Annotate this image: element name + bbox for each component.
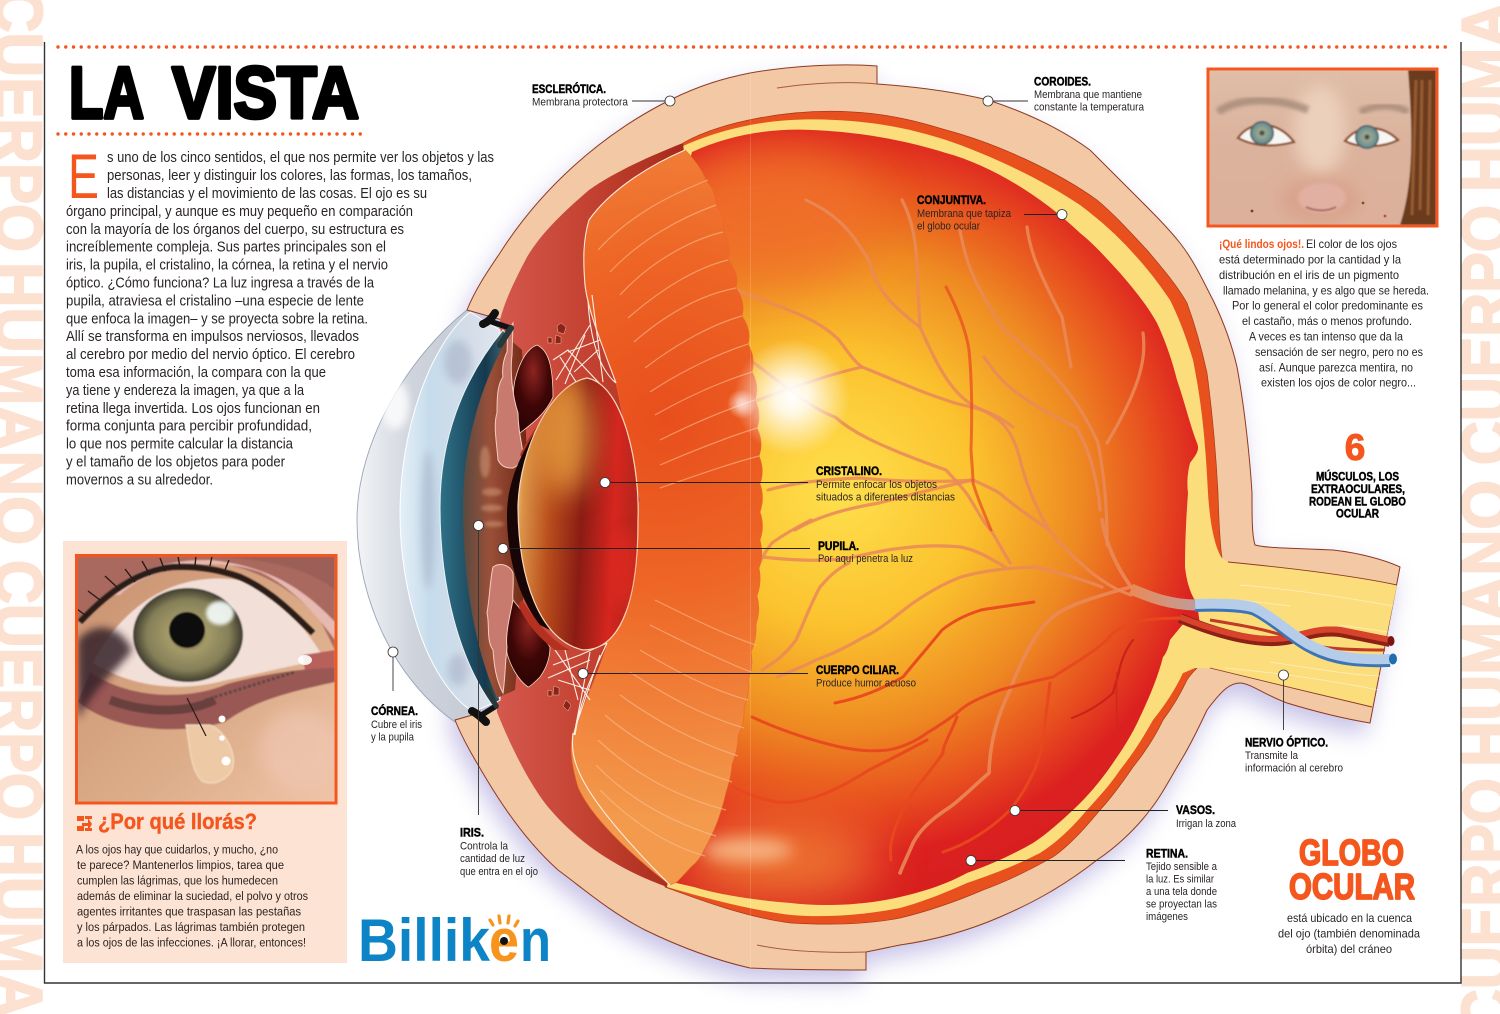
label: iris: Controla la [460,840,509,852]
label: esclerótica: ESCLERÓTICA. [532,81,606,96]
cornea grey patches [421,340,472,686]
intro text: forma conjunta para percibir profundidad, [66,419,312,435]
panel text: a los ojos de las infecciones. ¡A llorar, entonces! [77,936,306,950]
photo frame [76,556,336,803]
caption: qué lindos ojos: existen los ojos de color negro... [1261,376,1416,390]
eye shadow [450,77,1395,982]
label: coroides: Membrana que mantiene [1034,89,1142,101]
label: retina: imágenes [1146,911,1188,923]
label: conjuntiva: el globo ocular [917,220,980,232]
pale vessels [737,200,1144,873]
title dotted rule [58,132,361,136]
sclera seam lines [757,83,877,952]
label: vasos: VASOS. [1176,803,1215,817]
label: retina: RETINA. [1146,846,1188,860]
ciliary ribs [596,180,759,856]
panel text: agentes irritantes que traspasan las pestañas [77,904,301,918]
label: retina: a una tela donde [1146,886,1217,898]
intro text [66,142,494,488]
photo: child's eyes [1208,69,1437,226]
stat text: OCULAR [1336,506,1379,520]
sclera [455,65,1400,970]
intro text: lo que nos permite calcular la distancia [66,437,294,453]
heading: globo ocular [1289,832,1415,907]
label: cristalino [600,464,955,504]
label: iris: que entra en el ojo [460,866,538,878]
photo frame [1208,69,1437,226]
photo: crying eye [77,555,340,802]
label: conjuntiva: CONJUNTIVA. [917,193,986,207]
blood vessels [660,145,1185,900]
stat text: RODEAN EL GLOBO [1309,494,1406,508]
label: iris: IRIS. [460,826,484,840]
panel: por qué lloras [63,541,347,963]
label: cristalino: CRISTALINO. [816,464,882,478]
lower light patch [703,838,793,862]
iris pink lobe upper [495,323,523,468]
logo: Billiken: Billik [358,907,491,974]
intro text: movernos a su alrededor. [66,472,213,488]
side band left [0,0,56,1014]
intro text: las distancias y el movimiento de las cosas. El ojo es su [107,186,427,202]
label: esclerótica: Membrana protectora [532,96,629,108]
label: vasos [1010,803,1237,830]
panel text: te parece? Mantenerlos limpios, tarea que [77,858,284,872]
title: LA [69,53,144,134]
icon: arrow square [77,816,92,831]
caption: qué lindos ojos: el castaño, más o menos profundo. [1242,314,1412,328]
back chamber upper [513,345,553,433]
label: esclerótica [532,81,675,108]
back chamber lower [506,600,550,687]
retina [600,130,1200,905]
lens highlights [537,375,637,610]
label: córnea: Cubre el iris [371,719,422,731]
label: conjuntiva [917,193,1067,232]
intro text: órgano principal, y aunque es muy pequeño en comparación [66,204,413,220]
caption: qué lindos ojos: Por lo general el color predominante es [1232,299,1423,313]
red vessels [733,287,1185,860]
label: cristalino: Permite enfocar los objetos [816,479,937,491]
label: cuerpo ciliar: Produce humor acuoso [816,678,916,690]
nerve trunk fade [1131,589,1197,605]
intro text: que enfoca la imagen– y se proyecta sobre la retina. [66,311,368,327]
stat text [1309,468,1406,520]
print seam [750,73,752,968]
intro text: y el tamaño de los objetos para poder [66,454,285,470]
stat: six muscles [1309,427,1406,520]
text: globo ocular: está ubicado en la cuenca [1287,911,1412,925]
caption: qué lindos ojos: ¡Qué lindos ojos!. [1219,237,1304,251]
label: nervio óptico: NERVIO ÓPTICO. [1245,734,1328,750]
vitreous yellow layer and nerve [667,119,1397,916]
panel text: A los ojos hay que cuidarlos, y mucho, ¿no [76,842,278,856]
label: coroides: constante la temperatura [1034,102,1145,114]
nerve fibres [1225,585,1393,690]
limbus top [483,313,511,345]
lower orange tint [680,820,880,900]
label: pupila [498,539,913,565]
caption: qué lindos ojos: A veces es tan intenso que da la [1249,330,1403,344]
label: cuerpo ciliar: CUERPO CILIAR. [816,663,899,677]
text: globo ocular [1278,911,1420,956]
panel text [76,842,308,950]
label: iris: cantidad de luz [460,853,525,865]
label: córnea [371,647,422,744]
panel heading: ¿Por qué llorás? [98,809,257,834]
label: iris [460,520,538,878]
title [69,53,359,134]
label: nervio óptico [1245,670,1343,774]
limbus bottom [472,690,496,722]
panel text: cumplen las lágrimas, que los humedecen [77,874,278,888]
eye diagram [357,65,1400,982]
intro text: con la mayoría de los órganos del cuerpo, su estructura es [66,222,404,238]
logo: Billiken: e [489,907,519,974]
caption: qué lindos ojos: llamado melanina, y es algo que se hereda. [1223,283,1429,297]
intro text: ya tiene y endereza la imagen, ya que a la [66,383,305,399]
suspensory web lower [548,643,670,885]
cornea light-blue layer [400,312,500,712]
label: coroides: COROIDES. [1034,74,1091,88]
text: globo ocular: órbita) del cráneo [1306,942,1392,956]
logo rays [490,916,518,926]
logo: Billiken: n [520,907,551,974]
iris light highlights [480,446,504,527]
intro text: retina llega invertida. Los ojos funcionan en [66,401,320,417]
nerve end [1389,654,1397,664]
nerve sheath lines [1210,562,1397,707]
anterior chamber dark blue [440,330,510,705]
intro text: óptico. ¿Cómo funciona? La luz ingresa a través de la [66,276,375,292]
label: nervio óptico: Transmite la [1245,750,1299,762]
top dotted rule [58,45,1450,49]
caption: qué lindos ojos: está determinado por la cantidad y la [1219,252,1401,266]
ciliary muscle [490,143,700,887]
vessel end [1388,636,1394,646]
stat number: 6 [1345,427,1365,468]
side band right [1448,2,1500,1014]
drop cap: E [68,142,99,212]
intro text: iris, la pupila, el cristalino, la córnea, la retina y el nervio [66,258,388,274]
label: córnea: y la pupila [371,732,415,744]
label: retina: se proyectan las [1146,898,1217,910]
caption: qué lindos ojos: así. Aunque parezca mentira, no [1259,360,1413,374]
label: cristalino: situados a diferentes distancias [816,492,955,504]
intro text: pupila, atraviesa el cristalino –una especie de lente [66,293,364,309]
suspensory web upper [553,295,616,385]
black crescent [507,425,550,630]
stat text: EXTRAOCULARES, [1311,482,1405,496]
iris brown [463,338,530,698]
iris pink lobe lower [487,565,513,693]
cornea highlight [381,381,409,429]
caption: qué lindos ojos: distribución en el iris de un pigmento [1219,268,1399,282]
small glare [727,389,757,419]
label: retina: Tejido sensible a [1146,861,1218,873]
cornea outer [357,310,500,722]
intro text: al cerebro por medio del nervio óptico. El cerebro [66,347,355,363]
optic vessel red [1180,617,1390,650]
label: pupila: Por aquí penetra la luz [818,553,913,565]
label: conjuntiva: Membrana que tapiza [917,208,1012,220]
intro text: Allí se transforma en impulsos nerviosos, llevados [66,329,359,345]
heading: globo ocular: GLOBO [1299,832,1404,873]
optic nerve blue [1195,604,1390,661]
text: globo ocular: del ojo (también denominada [1278,926,1420,940]
stat text: MÚSCULOS, LOS [1316,468,1399,484]
intro text: increíblemente compleja. Sus partes principales son el [66,240,386,256]
caption: qué lindos ojos: El color de los ojos [1306,237,1397,251]
logo eye [500,937,508,945]
upper orange tint [660,145,880,285]
pigment granules [548,323,571,711]
ciliary band with scalloped edge [571,150,762,885]
intro text: personas, leer y distinguir los colores, las formas, los tamaños, [107,168,472,184]
caption: qué lindos ojos: sensación de ser negro, pero no es [1255,345,1423,359]
label: retina [966,846,1218,923]
label: coroides [983,74,1145,114]
lens [518,378,638,650]
intro text: s uno de los cinco sentidos, el que nos permite ver los objetos y las [107,150,494,166]
sliver behind lens [518,385,595,650]
label: córnea: CÓRNEA. [371,703,418,718]
panel text: y los párpados. Las lágrimas también protegen [77,920,305,934]
label: pupila: PUPILA. [818,539,859,553]
caption: qué lindos ojos [1219,237,1429,390]
title: VISTA [172,53,359,134]
heading: globo ocular: OCULAR [1289,866,1415,907]
label: cuerpo ciliar [578,663,916,690]
outer white edge of band [584,150,685,383]
label: retina: la luz. Es similar [1146,874,1214,886]
choroid layer [665,111,1230,924]
label: vasos: Irrigan la zona [1176,818,1237,830]
intro text: toma esa información, la compara con la que [66,365,326,381]
label: nervio óptico: información al cerebro [1245,762,1343,774]
panel text: además de eliminar la suciedad, el polvo y otros [77,889,308,903]
retina glare [734,339,850,455]
panel background [63,541,347,963]
